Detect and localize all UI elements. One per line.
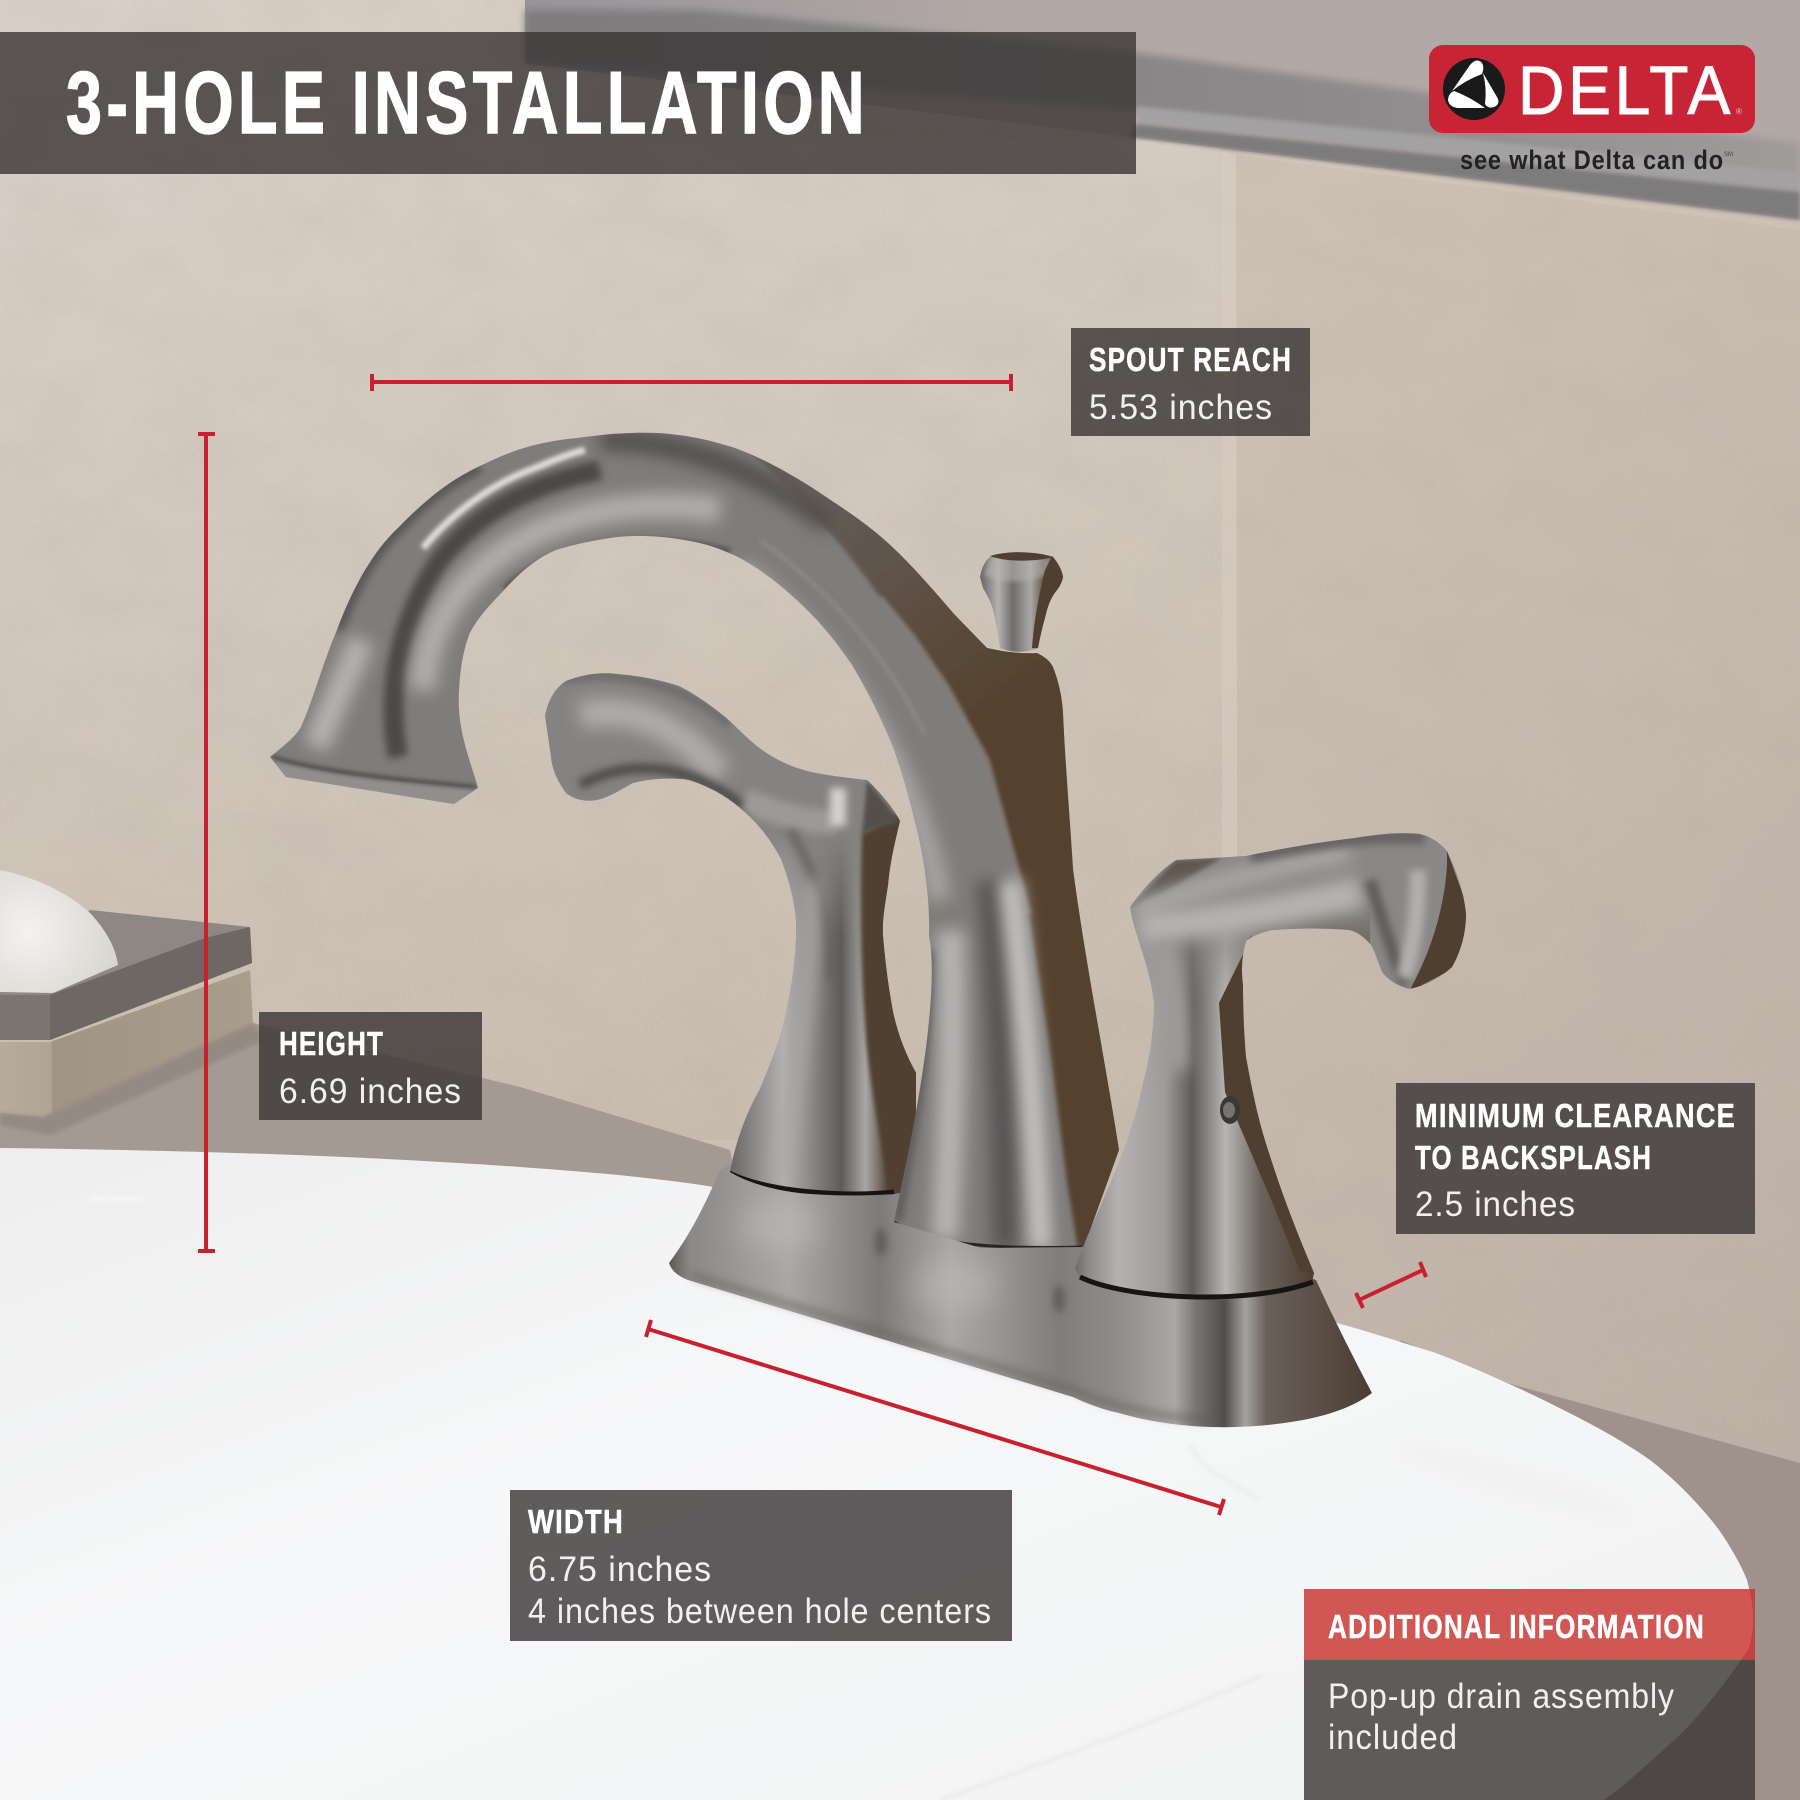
callout: minimum clearance: TO BACKSPLASH	[1415, 1139, 1652, 1176]
faucet: right handle	[1075, 833, 1466, 1300]
faucet	[260, 425, 1470, 1427]
title bar: 3-HOLE INSTALLATION	[66, 53, 869, 152]
panel body	[1304, 1660, 1755, 1800]
background: crown moulding	[525, 0, 1800, 220]
callout: width: WIDTH	[528, 1503, 624, 1540]
faucet: handle set screw	[1220, 1096, 1240, 1124]
callout: height: HEIGHT	[279, 1025, 384, 1062]
callout: spout reach	[1071, 328, 1310, 436]
callout: height	[259, 1012, 482, 1120]
callout: minimum clearance	[1396, 1083, 1755, 1234]
callout: width: 6.75 inches	[528, 1550, 712, 1589]
dimension line: width	[646, 1320, 1224, 1515]
callout: minimum clearance: 2.5 inches	[1415, 1185, 1576, 1224]
callout: minimum clearance: MINIMUM CLEARANCE	[1415, 1097, 1736, 1134]
callout: spout reach: SPOUT REACH	[1089, 341, 1292, 378]
faucet: deck plate	[669, 1165, 1372, 1427]
Delta logo	[1429, 45, 1755, 133]
callout: width	[510, 1490, 1012, 1641]
dimension line: minimum clearance	[1356, 1262, 1426, 1308]
panel body: included	[1328, 1718, 1458, 1757]
basin crease and soft reflections	[90, 1199, 1629, 1800]
faucet: lift rod knob	[980, 552, 1063, 652]
faucet: spout and column	[260, 425, 1135, 1255]
panel body: Pop-up drain assembly	[1328, 1677, 1675, 1716]
title bar	[0, 32, 1136, 174]
panel header	[1304, 1589, 1755, 1660]
sink basin	[0, 1148, 1753, 1800]
callout: height: 6.69 inches	[279, 1072, 462, 1111]
faucet: right handle collar gap	[1080, 1277, 1313, 1297]
faucet: left handle	[545, 673, 916, 1196]
background: countertop	[0, 1023, 1800, 1800]
panel: additional information	[1304, 1589, 1755, 1800]
Delta tagline: see what Delta can do	[1460, 145, 1724, 175]
Delta tagline: SM	[1724, 152, 1733, 158]
callout: spout reach: 5.53 inches	[1089, 388, 1273, 427]
soap dish	[0, 870, 265, 1135]
callout: width: 4 inches between hole centers	[528, 1592, 992, 1631]
dimension line: spout reach	[372, 374, 1011, 391]
Delta logo: DELTA	[1518, 52, 1734, 129]
Delta logo: ®	[1736, 107, 1742, 116]
panel header: ADDITIONAL INFORMATION	[1328, 1608, 1705, 1645]
dimension line: height	[198, 434, 215, 1251]
